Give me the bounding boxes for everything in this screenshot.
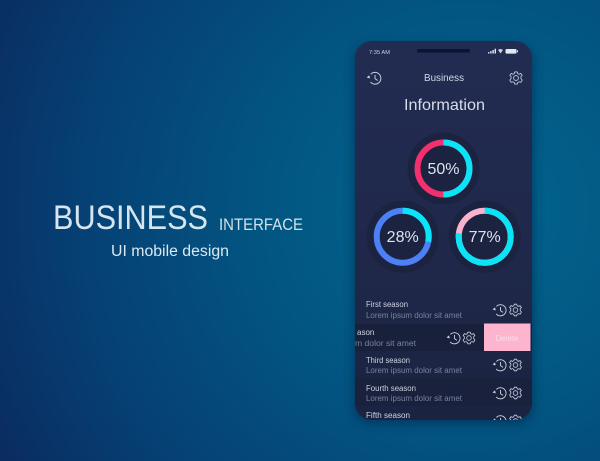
phone mockup	[355, 41, 532, 427]
list row: first season: First season	[366, 300, 408, 309]
list row: third season: Lorem ipsum dolor sit amet	[366, 366, 463, 375]
donut: 77%: 77%	[469, 229, 501, 246]
donut: 50%: 50%	[427, 161, 460, 178]
headline block	[53, 199, 303, 260]
list row: fifth season	[366, 412, 522, 420]
list row: swiped second season	[355, 324, 532, 351]
list row: fourth season: Lorem ipsum dolor sit amet	[366, 394, 463, 403]
header title: Business	[424, 72, 464, 84]
list row: swiped second season: ason	[357, 328, 374, 337]
settings icon: header	[510, 72, 522, 84]
list row: fifth season: Fifth season	[366, 411, 410, 420]
list row: fourth season	[355, 385, 532, 406]
donut: 77%	[449, 201, 521, 273]
history icon: header	[367, 72, 381, 84]
list row: third season: Third season	[366, 356, 410, 365]
notch speaker	[417, 49, 470, 52]
phone shadow	[353, 44, 534, 424]
title: business: BUSINESS	[53, 199, 208, 237]
title: interface: INTERFACE	[219, 215, 303, 234]
donut: 28%	[367, 201, 439, 273]
signal icon	[488, 49, 496, 54]
phone screen	[355, 41, 532, 420]
donut: 50%	[408, 132, 480, 204]
list row: swiped second season: m dolor sit amet	[355, 339, 417, 348]
list row: first season	[366, 300, 521, 320]
clock: 7:35 AM	[369, 50, 390, 56]
heading: information: Information	[404, 97, 485, 114]
delete button: Delete	[495, 334, 519, 343]
list row: first season: Lorem ipsum dolor sit amet	[366, 311, 463, 320]
list row: fourth season: Fourth season	[366, 384, 416, 393]
wifi icon	[498, 49, 503, 54]
delete button	[484, 324, 530, 351]
status bar	[369, 48, 518, 54]
donut: 28%: 28%	[387, 229, 419, 246]
subtitle: UI mobile design	[111, 243, 229, 260]
list row: third season	[366, 356, 521, 375]
battery icon	[506, 49, 518, 54]
